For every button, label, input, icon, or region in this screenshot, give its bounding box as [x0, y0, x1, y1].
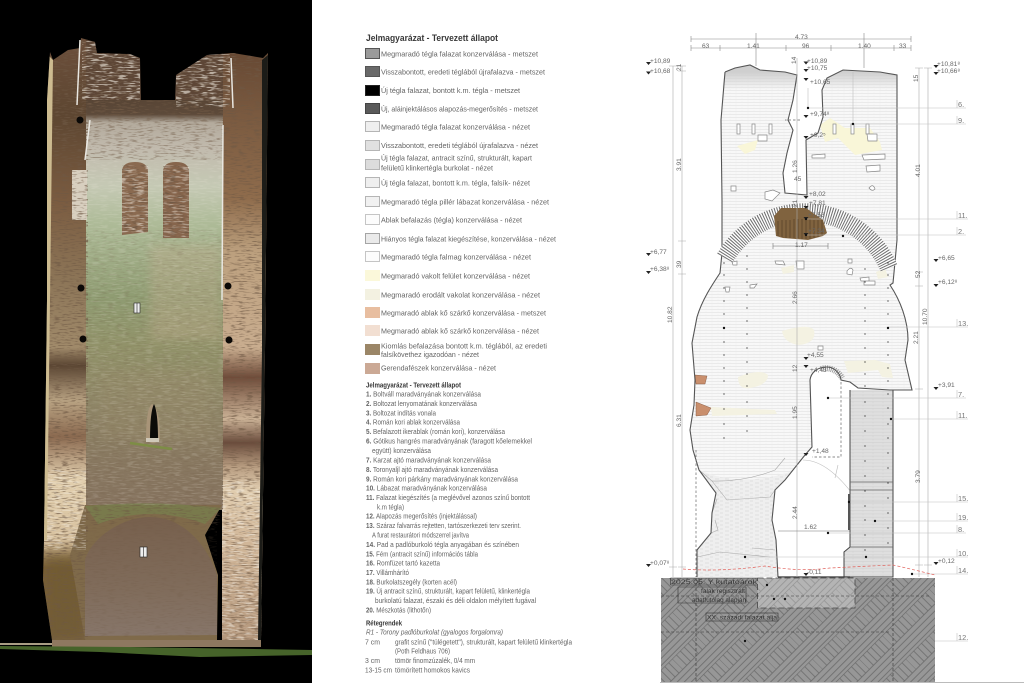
list items: 16. Romfüzet tartó kazetta	[366, 560, 440, 568]
layer order table: tömör finomzúzalék, 0/4 mm	[395, 658, 475, 665]
top shading	[722, 65, 897, 90]
layer order table: 13-15 cm	[365, 668, 392, 674]
dimension lines: 2.21	[913, 331, 920, 344]
marker values: +6,38⁸	[650, 266, 670, 273]
dimension lines: 1.40	[858, 43, 871, 50]
dashed door reveal	[696, 120, 841, 577]
arrow slit	[130, 404, 172, 449]
layer order table: R1 - Torony padlóburkolat (gyalogos forgalomra)	[366, 630, 503, 636]
list items: 4. Román kori ablak konzerválása	[366, 420, 460, 426]
list items: 14. Pad a padlóburkoló tégla anyagában és színében	[366, 542, 519, 549]
swatch rows: Új tégla falazat, antracit színű, strukturált, kapart	[381, 154, 532, 162]
core-drilling dots	[724, 256, 888, 550]
layer order table: (Poth Feldhaus 706)	[395, 648, 450, 656]
list items: együtt) konzerválása	[372, 448, 431, 455]
marker values: +7,34	[808, 228, 825, 235]
marker values: +7,81	[809, 200, 826, 207]
vault arch voussoirs	[725, 212, 889, 268]
marker values: +6,65	[938, 255, 955, 262]
swatch rows: felületű klinkertégla burkolat - nézet	[381, 164, 493, 172]
putlog holes	[80, 120, 229, 340]
swatch rows: Ablak befalazás (tégla) konzerválása - nézet	[381, 216, 522, 224]
ground annotation boxes	[670, 578, 778, 622]
marker values: +10,68	[650, 68, 671, 75]
callout numbers	[958, 100, 968, 642]
callout numbers: 6.	[958, 100, 964, 109]
dimension lines: 21	[792, 199, 799, 207]
ground strip	[0, 640, 312, 657]
dimension lines: 3.91	[676, 158, 683, 171]
list items: 3. Boltozat indítás vonala	[366, 410, 436, 418]
layer order table: 7 cm	[365, 640, 380, 646]
list items: 10. Lábazat maradványának konzerválása	[366, 486, 487, 492]
leader lines and numbered callouts	[724, 72, 968, 642]
swatch rows: Megmaradó ablak kő szárkő konzerválása - nézet	[381, 326, 539, 336]
dimension lines	[667, 33, 932, 577]
dimension lines: 1.41	[747, 43, 760, 50]
numbered list of works	[365, 382, 572, 674]
swatch rows: Megmaradó erodált vakolat konzerválása - nézet	[381, 290, 540, 300]
marker values: +10,89	[650, 58, 671, 65]
drawing: tower elevation	[690, 65, 912, 577]
door arch voussoirs	[821, 368, 842, 378]
swatch rows: Gerendafészek konzerválása - nézet	[381, 364, 496, 372]
legend heading: Jelmagyarázat - Tervezett állapot	[366, 33, 498, 43]
ground section with foundation hatching	[660, 578, 1024, 683]
window niches	[122, 162, 189, 238]
marker triangles	[646, 62, 938, 576]
marker values: +10,75	[807, 65, 828, 72]
list items: 8. Toronyaljl ajtó maradványának konzerválása	[366, 467, 498, 474]
marker values	[650, 58, 960, 576]
marker values: +4,43	[810, 367, 827, 374]
marker values: +0,12	[938, 558, 955, 565]
list items: 12. Alapozás megerősítés (injektálással)	[366, 514, 477, 520]
swatch rows: Új tégla falazat, bontott k.m. tégla - metszet	[381, 86, 520, 95]
list heading: Jelmagyarázat - Tervezett állapot	[366, 382, 462, 390]
dimension lines: 3.79	[915, 470, 922, 483]
red dashed terrain line	[683, 565, 935, 575]
layer order table	[365, 630, 572, 674]
callout numbers: 19.	[958, 513, 968, 522]
lightning conductor	[77, 40, 233, 300]
dimension lines: 1.26	[792, 160, 799, 173]
beam sockets	[695, 375, 711, 416]
list items: 1. Boltváll maradványának konzerválása	[366, 392, 481, 398]
list items: 13. Száraz falvarrás rejtetten, tartószerkezeti terv szerint.	[366, 523, 521, 530]
callout numbers: 13.	[958, 319, 968, 328]
dimension lines: 4.01	[915, 164, 922, 177]
dimension lines: 2.44	[792, 506, 799, 519]
list items: 2. Boltozat lenyomatának konzerválása	[366, 401, 477, 408]
list items: 5. Befalazott ikerablak (román kori), konzerválása	[366, 429, 505, 436]
dimension lines: 52	[915, 270, 922, 278]
dimension lines: 33	[899, 43, 907, 50]
marker values: +4,55	[807, 352, 824, 359]
marker values: +7,53	[808, 212, 825, 219]
callout numbers: 11.	[958, 411, 968, 420]
list items: 18. Burkolatszegély (korten acél)	[366, 580, 457, 586]
elevation markers	[646, 58, 960, 576]
ground annotation boxes: XX. századi falazat alja	[707, 614, 777, 622]
dimension lines: 10.70	[922, 308, 929, 325]
swatch rows: Megmaradó tégla falazat konzerválása - metszet	[381, 50, 538, 58]
swatch rows: Új tégla falazat, bontott k.m. tégla, falsík- nézet	[381, 178, 530, 188]
list items: k.m tégla)	[377, 504, 404, 512]
marker values: +10,89	[807, 58, 828, 65]
callout numbers: 8.	[958, 525, 964, 534]
marker values: +8,02	[809, 191, 826, 198]
list items: 6. Gótikus hangrés maradványának (faragott kőelemekkel	[366, 438, 532, 446]
ground annotation boxes: falak regisztrált	[701, 588, 745, 595]
swatch rows: Megmaradó tégla falazat konzerválása - nézet	[381, 122, 530, 132]
dimension lines: 1.62	[804, 524, 817, 531]
main wall	[690, 65, 912, 577]
dimension lines: 96	[802, 43, 810, 50]
plaster patches	[737, 118, 882, 155]
marker values: -0,11	[807, 569, 822, 576]
callout numbers: 9.	[958, 116, 964, 125]
list items: 19. Új antracit színű, strukturált, kapart felületű, klinkertégla	[366, 586, 530, 596]
marker values: +6,12⁸	[938, 279, 958, 286]
dimension lines: 4.73	[795, 34, 808, 41]
ground annotation boxes: 2025.05. Y kutatóárok	[671, 579, 758, 586]
swatch rows: Visszabontott, eredeti téglából újrafalazva - nézet	[381, 141, 538, 150]
list items: 20. Mészkotás (lithotőn)	[366, 608, 431, 614]
opening outlines	[725, 124, 885, 350]
layer order table: 3 cm	[365, 658, 380, 665]
swatch rows: Megmaradó vakolt felület konzerválása - nézet	[381, 272, 530, 280]
dimension lines: 1.95	[792, 406, 799, 419]
list items	[366, 392, 536, 614]
information plates	[134, 303, 147, 557]
swatch rows: Megmaradó tégla falmag konzerválása - nézet	[381, 252, 531, 262]
dimension lines: 15	[913, 74, 920, 82]
swatch rows: Visszabontott, eredeti téglából újrafalazva - metszet	[381, 68, 545, 76]
marker values: +0,07⁸	[650, 560, 670, 567]
callout numbers: 2.	[958, 227, 964, 236]
list items: A furat restaurátori módszerrel javítva	[372, 532, 469, 540]
ground annotation boxes: adatfutólag alapján	[692, 597, 746, 604]
marker values: +10,65	[810, 79, 831, 86]
swatch rows: Kiomlás befalazása bontott k.m. téglából, az eredeti	[381, 342, 547, 350]
callout numbers: 15.	[958, 494, 968, 503]
dimension lines: 10.82	[667, 306, 674, 323]
list items: 9. Román kori párkány maradványának konzerválása	[366, 476, 518, 484]
door area lines	[803, 460, 851, 492]
dimension lines: 14	[791, 56, 798, 64]
marker values: +1,48	[812, 448, 829, 455]
dimension lines: 12	[792, 364, 799, 372]
swatch rows: Új, aláinjektálásos alapozás-megerősítés - metszet	[381, 104, 538, 114]
panel: point-cloud photo of the tower	[0, 0, 312, 683]
marker values: +10,66⁸	[937, 68, 960, 75]
legend: planned state	[365, 33, 556, 374]
callout numbers: 10.	[958, 549, 968, 558]
dimension lines: 63	[702, 43, 710, 50]
layer order table: tömörített homokos kavics	[395, 668, 471, 674]
dimension lines: 39	[676, 260, 683, 268]
list items: 17. Villámhárító	[366, 570, 409, 577]
dimension lines: 2.66	[792, 291, 799, 304]
right pier block	[844, 390, 893, 577]
swatch rows: falsíkövethez igazodóan - nézet	[381, 350, 479, 359]
list items: burkolatú falazat, északi és déli oldalon mélyített fugával	[375, 598, 536, 605]
marker values: +9,74⁸	[810, 111, 830, 118]
pier stonework	[697, 470, 790, 577]
dimension lines: 1.17	[795, 242, 808, 249]
callout numbers: 14.	[958, 566, 968, 575]
dimension lines: 6.31	[676, 414, 683, 427]
marker values: +6,77	[650, 249, 667, 256]
marker values: +3,91	[938, 382, 955, 389]
swatch rows: Megmaradó tégla pillér lábazat konzerválása - nézet	[381, 198, 549, 206]
marker values: +9,2⁵	[810, 132, 826, 139]
marker values: +10,81⁸	[937, 61, 960, 68]
layer order heading: Rétegrendek	[366, 620, 402, 628]
list items: 11. Falazat kiegészítés (a meglévővel azonos színű bontott	[366, 495, 530, 502]
swatch rows: Megmaradó ablak kő szárkő konzerválása - metszet	[381, 308, 546, 318]
list items: 7. Karzat ajtó maradványának konzerválása	[366, 458, 491, 464]
callout numbers: 12.	[958, 633, 968, 642]
swatch rows: Hiányos tégla falazat kiegészítése, konzerválása - nézet	[381, 234, 556, 244]
list items: 15. Fém (antracit színű) információs tábla	[366, 552, 478, 558]
brown infill keystone	[774, 208, 827, 240]
dimension lines: 21	[676, 63, 683, 71]
callout numbers: 7.	[958, 390, 964, 399]
dimension lines: 45	[794, 176, 802, 183]
callout numbers: 11.	[958, 211, 968, 220]
layer order table: grafit színű ("túlégetett"), strukturált, kapart felületű klinkertégla	[395, 640, 572, 646]
swatch rows	[365, 48, 556, 374]
wall outline	[690, 65, 912, 577]
